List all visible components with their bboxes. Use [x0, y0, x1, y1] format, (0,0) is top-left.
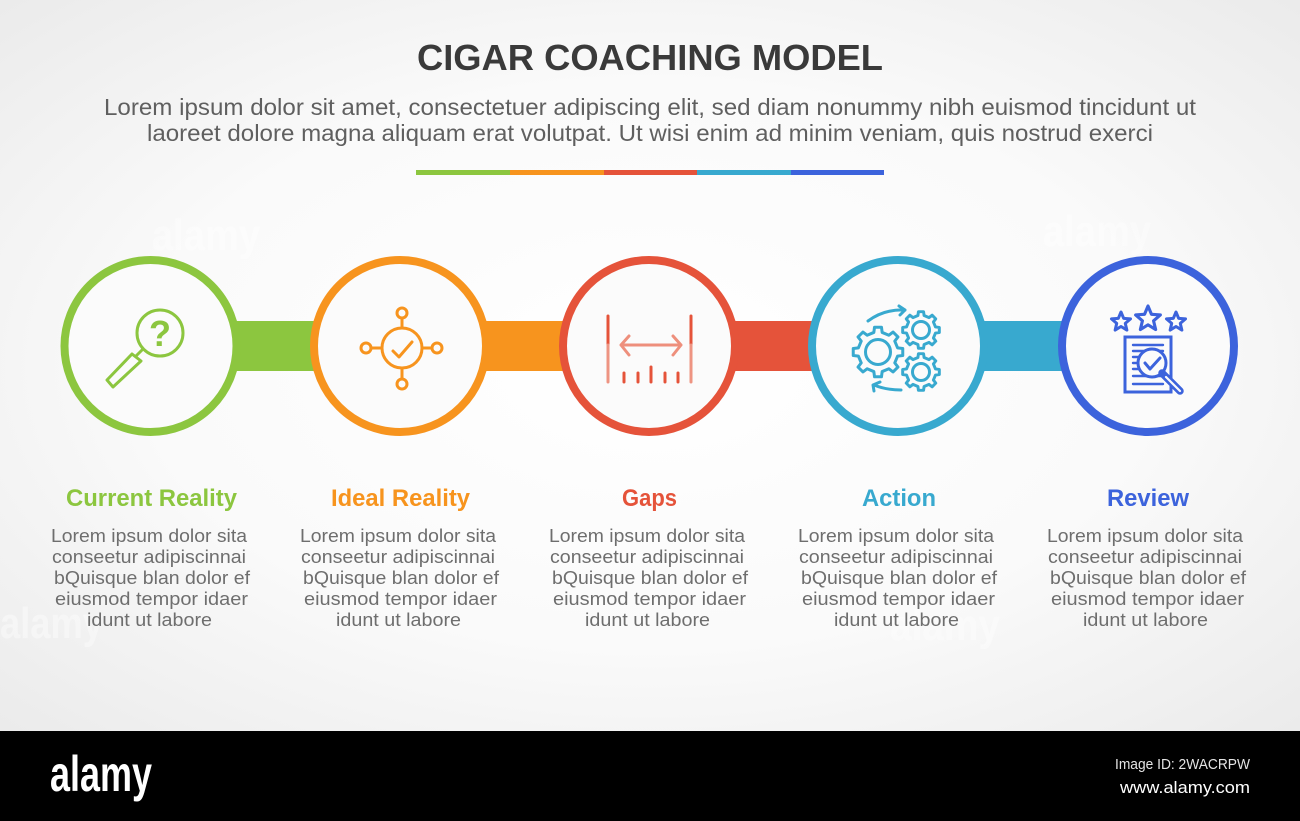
heading: review: Review — [1107, 485, 1189, 512]
description: action — [798, 525, 998, 630]
description: ideal reality: idunt ut labore — [336, 609, 461, 630]
description: action: conseetur adipiscinnai — [799, 546, 993, 567]
circle with target check icon — [314, 260, 486, 432]
title: CIGAR COACHING MODEL — [417, 37, 883, 78]
subtitle text: Lorem ipsum dolor sit amet, consectetuer adipiscing elit, sed diam nonummy nibh euismod tincidunt ut — [104, 94, 1196, 120]
description: ideal reality: bQuisque blan dolor ef — [303, 567, 500, 588]
heading: ideal reality: Ideal Reality — [331, 485, 471, 512]
footer logo: alamy — [50, 746, 152, 802]
description: review: Lorem ipsum dolor sita — [1047, 525, 1244, 546]
circle with magnifier icon: ? — [149, 313, 171, 354]
heading: action: Action — [862, 485, 936, 512]
description: ideal reality: conseetur adipiscinnai — [301, 546, 495, 567]
description: gaps — [549, 525, 749, 630]
circle with gears icon — [812, 260, 984, 432]
heading: gaps: Gaps — [622, 485, 677, 512]
description: action: idunt ut labore — [834, 609, 959, 630]
description: review — [1047, 525, 1247, 630]
panel: action — [798, 260, 998, 630]
panel: ideal reality — [300, 260, 500, 630]
description: action: eiusmod tempor idaer — [802, 588, 995, 609]
subtitle text — [104, 94, 1196, 146]
panel: gaps — [549, 260, 749, 630]
watermarks — [0, 207, 1151, 650]
description: review: conseetur adipiscinnai — [1048, 546, 1242, 567]
description: current reality: bQuisque blan dolor ef — [54, 567, 251, 588]
description: ideal reality: eiusmod tempor idaer — [304, 588, 497, 609]
footer image id: Image ID: 2WACRPW — [1115, 756, 1251, 773]
watermarks: alamy — [1043, 207, 1151, 256]
heading: current reality: Current Reality — [66, 485, 238, 512]
description: ideal reality: Lorem ipsum dolor sita — [300, 525, 497, 546]
description: gaps: bQuisque blan dolor ef — [552, 567, 749, 588]
description: current reality — [51, 525, 251, 630]
description: gaps: idunt ut labore — [585, 609, 710, 630]
subtitle text: laoreet dolore magna aliquam erat volutpat. Ut wisi enim ad minim veniam, quis nostrud exerci — [147, 120, 1153, 146]
description: gaps: Lorem ipsum dolor sita — [549, 525, 746, 546]
watermarks: alamy — [0, 599, 103, 648]
footer url: www.alamy.com — [1119, 778, 1250, 797]
description: gaps: conseetur adipiscinnai — [550, 546, 744, 567]
description: gaps: eiusmod tempor idaer — [553, 588, 746, 609]
description: review: idunt ut labore — [1083, 609, 1208, 630]
description: action: Lorem ipsum dolor sita — [798, 525, 995, 546]
description: current reality: idunt ut labore — [87, 609, 212, 630]
description: current reality: eiusmod tempor idaer — [55, 588, 248, 609]
multicolour divider — [416, 170, 884, 175]
circle with gap measure icon — [563, 260, 735, 432]
description: review: eiusmod tempor idaer — [1051, 588, 1244, 609]
circle with review document icon — [1062, 260, 1234, 432]
watermarks: alamy — [152, 211, 260, 260]
watermarks: alamy — [890, 601, 1000, 650]
description: review: bQuisque blan dolor ef — [1050, 567, 1247, 588]
description: current reality: conseetur adipiscinnai — [52, 546, 246, 567]
description: ideal reality — [300, 525, 500, 630]
connector bars — [230, 321, 1068, 371]
panel: review — [1047, 260, 1247, 630]
panel: current reality — [51, 260, 251, 630]
description: current reality: Lorem ipsum dolor sita — [51, 525, 248, 546]
circle with magnifier icon — [64, 260, 236, 432]
description: action: bQuisque blan dolor ef — [801, 567, 998, 588]
footer band — [0, 731, 1300, 821]
